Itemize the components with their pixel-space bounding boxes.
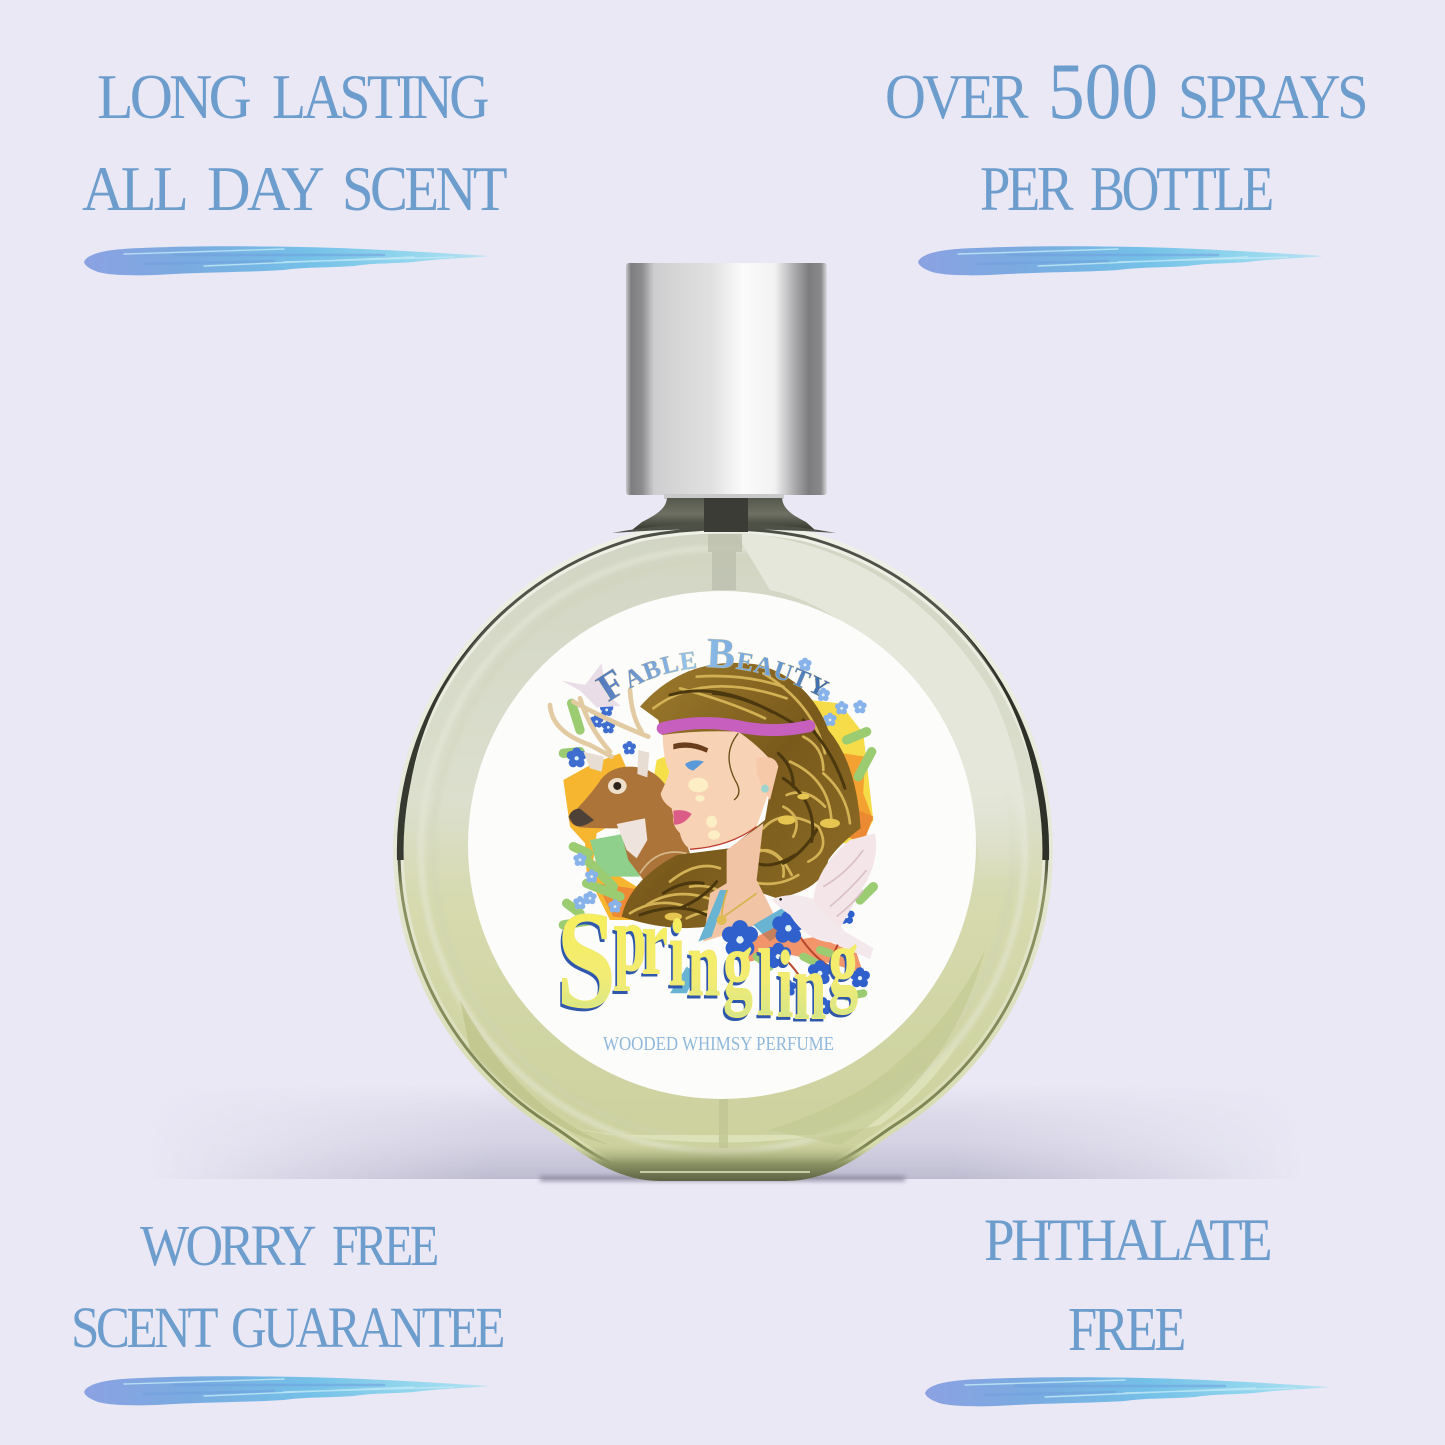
feature: long lasting all day scent: LASTING — [272, 61, 488, 132]
bottle shadow — [208, 1099, 1241, 1184]
feature: worry free scent guarantee: FREE — [332, 1213, 437, 1278]
deer — [550, 690, 690, 880]
feature: over 500 sprays per bottle: SPRAYS — [1178, 61, 1365, 132]
product name: pringling — [614, 887, 858, 1040]
feature: long lasting all day scent: LONG — [97, 61, 251, 132]
feature: worry free scent guarantee: SCENT — [71, 1295, 218, 1360]
perfume descriptor: WOODED WHIMSY PERFUME — [603, 1033, 834, 1055]
face — [661, 731, 778, 849]
brand arc text: FABLE BEAUTY — [594, 638, 830, 702]
feature: over 500 sprays per bottle: 500 — [1048, 48, 1158, 136]
feature: over 500 sprays per bottle: OVER — [885, 61, 1029, 132]
hair — [622, 663, 861, 928]
brush stroke underline — [918, 246, 1324, 275]
feature: phthalate free: FREE — [1068, 1296, 1184, 1364]
label — [468, 591, 976, 1099]
shoulder band — [612, 522, 836, 533]
glass highlight bottom — [576, 1050, 954, 1142]
glass body — [393, 498, 1053, 1185]
dove right — [772, 833, 876, 959]
feature: phthalate free — [925, 1207, 1331, 1406]
glass highlight top right — [736, 532, 1022, 852]
brush stroke underline — [925, 1377, 1331, 1406]
bottle cap — [626, 263, 827, 499]
feature: long lasting all day scent: SCENT — [342, 153, 507, 224]
neck and chest — [703, 823, 773, 942]
feature: long lasting all day scent: DAY — [207, 153, 324, 224]
feature: long lasting all day scent: ALL — [82, 153, 186, 224]
neck centre shadow — [704, 498, 748, 532]
background foliage — [563, 658, 873, 925]
feature: worry free scent guarantee — [71, 1213, 503, 1405]
feature: over 500 sprays per bottle: BOTTLE — [1090, 153, 1272, 224]
brush stroke underline — [84, 1376, 490, 1405]
feature: worry free scent guarantee: WORRY — [140, 1213, 316, 1278]
label artwork — [548, 638, 878, 1043]
dip tube top — [708, 534, 742, 590]
product name: S — [557, 882, 616, 1037]
flower crown — [663, 723, 809, 730]
blue dress — [670, 890, 805, 993]
feature: long lasting all day scent — [82, 61, 507, 275]
dove left — [562, 663, 621, 707]
product name: S — [555, 885, 614, 1040]
product name: pringling — [612, 890, 856, 1043]
bottle neck — [632, 498, 815, 530]
feature: worry free scent guarantee: GUARANTEE — [231, 1295, 503, 1360]
necklace — [717, 890, 757, 925]
feature: phthalate free: PHTHALATE — [984, 1207, 1270, 1273]
dip tube bottom — [719, 1098, 728, 1148]
perfume bottle — [393, 263, 1053, 1181]
feature: over 500 sprays per bottle: PER — [980, 153, 1074, 224]
lower flowers and branches — [722, 908, 870, 1014]
brush stroke underline — [84, 246, 490, 275]
feature: over 500 sprays per bottle — [885, 48, 1365, 275]
